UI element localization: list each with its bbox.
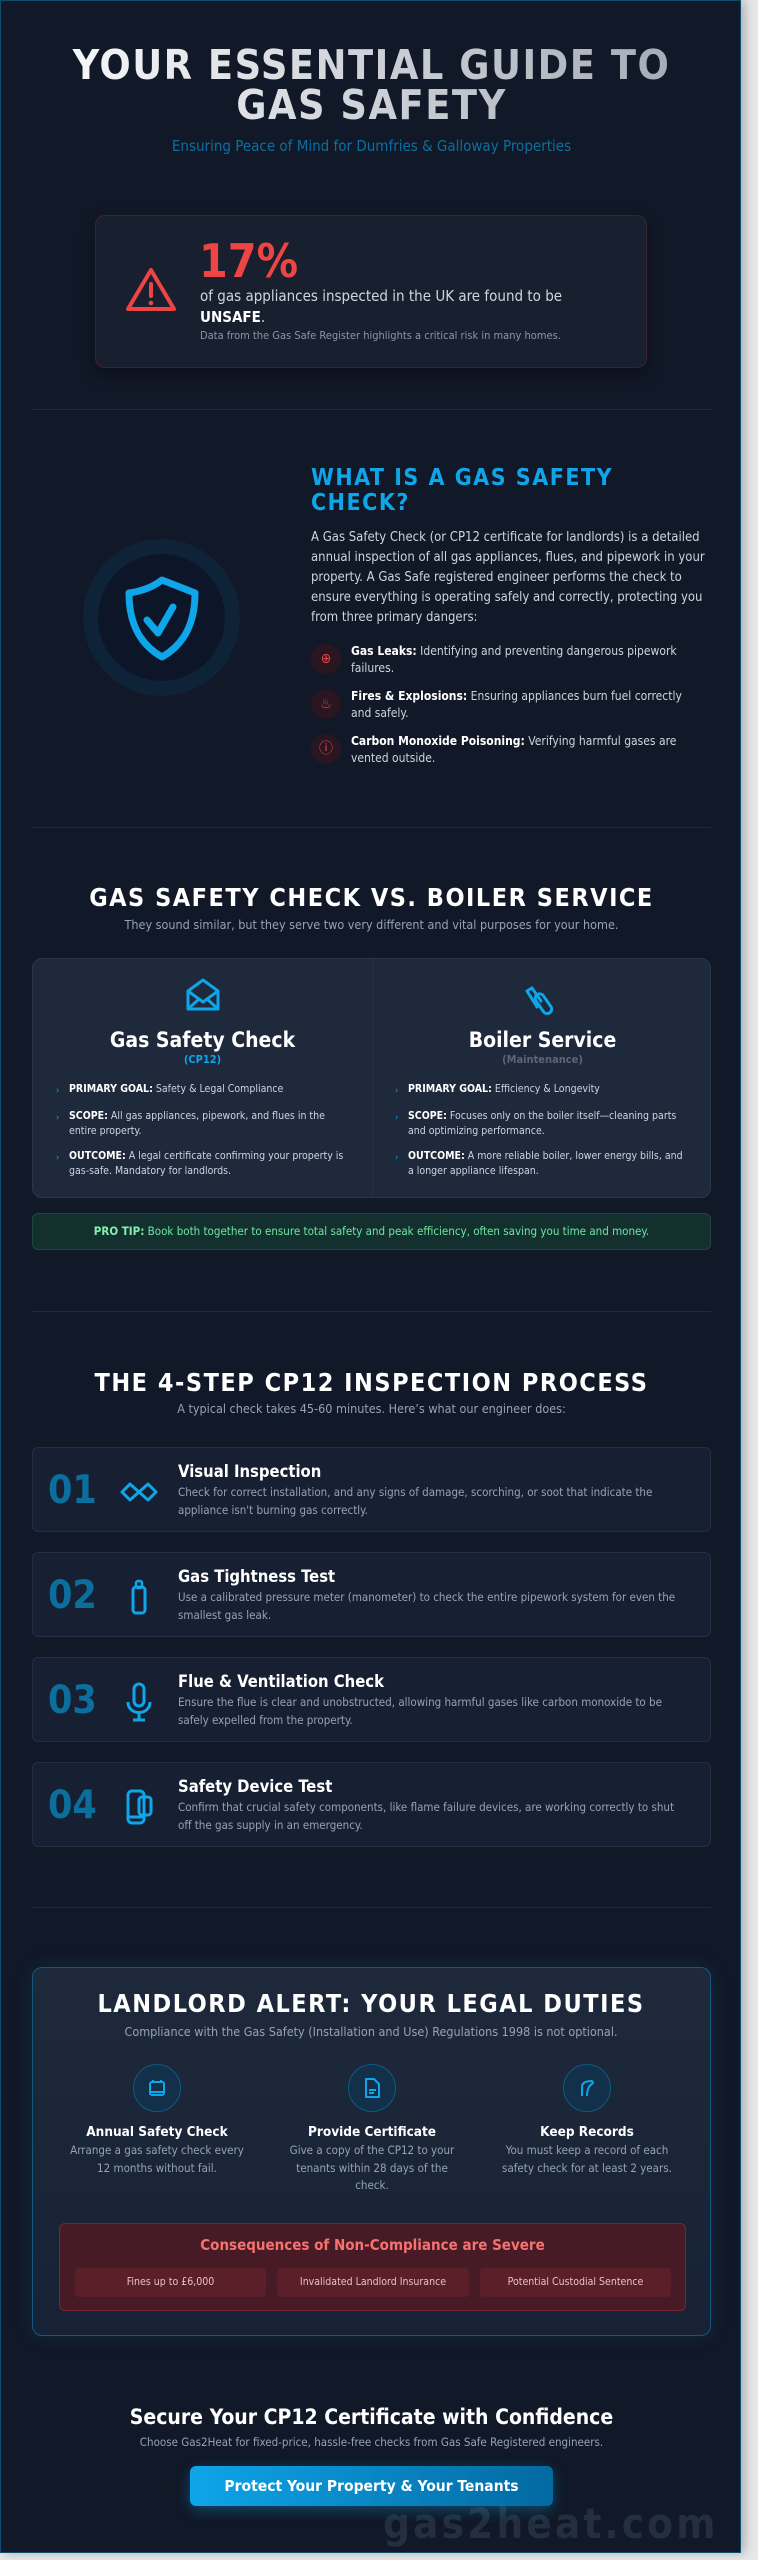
- step 1: Check for correct installation, and any signs of damage, scorching, or soot that indicate the appliance isn't burning gas correctly.: [178, 1485, 652, 1516]
- paragraph: A Gas Safety Check (or CP12 certificate for landlords) is a detailed annual inspection of all gas appliances, flues, and pipework in your property. A Gas Safe registered engineer performs the check to ensure everything is operating safely and correctly, protecting you from three primary dangers:: [311, 530, 705, 625]
- stat number: 17%: [199, 234, 298, 288]
- danger: fires: Fires & Explosions: Ensuring appliances burn fuel correctly and safely.: [351, 689, 682, 720]
- duty: certificate: [290, 2064, 454, 2192]
- step 4: [32, 1762, 711, 1847]
- heading: process: THE 4-STEP CP12 INSPECTION PROCESS: [95, 1368, 648, 1397]
- heading: what is: WHAT IS A GAS SAFETY CHECK?: [311, 465, 613, 516]
- column: gas safety check: PRIMARY GOAL: Safety & Legal Compliance: [69, 1083, 283, 1095]
- stat source: Data from the Gas Safe Register highlights a critical risk in many homes.: [200, 329, 561, 342]
- step 2: 02: [48, 1573, 97, 1618]
- CTA button: [190, 2466, 553, 2506]
- duty: annual check: [70, 2064, 244, 2174]
- duty: records: Keep Records: [540, 2124, 634, 2140]
- column: gas safety check: ›: [56, 1153, 59, 1163]
- CTA button: Protect Your Property & Your Tenants: [224, 2477, 519, 2495]
- icon: flue: [126, 1682, 152, 1722]
- title: [1, 45, 742, 125]
- title: GAS SAFETY: [236, 81, 507, 129]
- consequences box: [59, 2223, 686, 2311]
- heading: LANDLORD ALERT: YOUR LEGAL DUTIES: [97, 1989, 645, 2018]
- subheading: Compliance with the Gas Safety (Installation and Use) Regulations 1998 is not optional.: [124, 2024, 618, 2039]
- icon: eye: [120, 1482, 158, 1502]
- icon: wrench: [525, 986, 554, 1015]
- column: boiler service: [395, 986, 683, 1177]
- danger: gas leaks: ⊕: [321, 651, 331, 667]
- step 4: 04: [48, 1783, 97, 1828]
- step 4: Confirm that crucial safety components, like flame failure devices, are working correctly to shut off the gas supply in an emergency.: [178, 1800, 674, 1832]
- duty: records: You must keep a record of each safety check for at least 2 years.: [502, 2143, 672, 2174]
- column: boiler service: ›: [395, 1153, 398, 1163]
- column: boiler service: (Maintenance): [502, 1053, 583, 1066]
- danger: gas leaks: Gas Leaks: Identifying and preventing dangerous pipework failures.: [351, 644, 677, 675]
- step 3: Flue & Ventilation Check: [178, 1672, 384, 1691]
- pro tip: [32, 1213, 711, 1250]
- step 1: 01: [48, 1468, 97, 1513]
- title: YOUR ESSENTIAL GUIDE TO: [73, 41, 670, 89]
- pro tip: PRO TIP: Book both together to ensure total safety and peak efficiency, often saving you time and money.: [94, 1224, 649, 1238]
- danger: CO: Carbon Monoxide Poisoning: Verifying harmful gases are vented outside.: [351, 734, 676, 765]
- watermark: gas2heat.com: [383, 2499, 719, 2548]
- step 1: [32, 1447, 711, 1532]
- comparison panel: [32, 958, 711, 1198]
- column: gas safety check: ›: [56, 1086, 59, 1096]
- step 2: Use a calibrated pressure meter (manometer) to check the entire pipework system for even the smallest gas leak.: [178, 1590, 675, 1622]
- duty: annual check: Annual Safety Check: [86, 2124, 228, 2140]
- danger: fires: ♨: [320, 696, 332, 712]
- consequences box: Consequences of Non-Compliance are Severe: [200, 2236, 545, 2254]
- column: boiler service: ›: [395, 1113, 398, 1123]
- CTA subtext: Choose Gas2Heat for fixed-price, hassle-free checks from Gas Safe Registered engineers.: [140, 2435, 603, 2449]
- column: gas safety check: OUTCOME: A legal certificate confirming your property is gas-safe. Mandatory for landlords.: [69, 1150, 343, 1177]
- stat text: of gas appliances inspected in the UK are found to be UNSAFE.: [200, 287, 562, 326]
- step 2: Gas Tightness Test: [178, 1567, 335, 1586]
- CTA heading: Secure Your CP12 Certificate with Confidence: [130, 2405, 613, 2429]
- consequence pills: [75, 2268, 266, 2297]
- column: boiler service: OUTCOME: A more reliable boiler, lower energy bills, and a longer appliance lifespan.: [408, 1150, 683, 1177]
- stat card: [95, 215, 647, 368]
- icon: meter: [132, 1580, 146, 1614]
- duty: certificate: Provide Certificate: [308, 2124, 436, 2140]
- icon: warning triangle: [126, 268, 176, 311]
- danger list: [311, 644, 682, 765]
- icon: envelope: [186, 978, 220, 1010]
- column: boiler service: SCOPE: Focuses only on the boiler itself—cleaning parts and optimizing performance.: [408, 1110, 676, 1137]
- subheading: A typical check takes 45-60 minutes. Here’s what our engineer does:: [177, 1401, 566, 1416]
- step 3: Ensure the flue is clear and unobstructed, allowing harmful gases like carbon monoxide to be safely expelled from the property.: [178, 1695, 662, 1726]
- heading: comparison: GAS SAFETY CHECK VS. BOILER SERVICE: [89, 883, 654, 912]
- step 4: Safety Device Test: [178, 1777, 332, 1796]
- panel: landlord alert: [32, 1967, 711, 2336]
- step 1: Visual Inspection: [178, 1462, 321, 1481]
- duty: annual check: Arrange a gas safety check every 12 months without fail.: [70, 2143, 244, 2174]
- icon: device: [126, 1790, 152, 1824]
- subheading: They sound similar, but they serve two very different and vital purposes for your home.: [125, 917, 618, 932]
- duty: certificate: Give a copy of the CP12 to your tenants within 28 days of the check.: [290, 2143, 454, 2192]
- column: gas safety check: Gas Safety Check: [110, 1028, 295, 1052]
- subtitle: Ensuring Peace of Mind for Dumfries & Galloway Properties: [172, 137, 571, 155]
- consequences box: Invalidated Landlord Insurance: [300, 2276, 446, 2288]
- danger: CO: ⓘ: [319, 741, 333, 757]
- step 3: [32, 1657, 711, 1742]
- step 3: 03: [48, 1678, 97, 1723]
- column: gas safety check: SCOPE: All gas appliances, pipework, and flues in the entire property.: [69, 1110, 325, 1137]
- consequences box: Potential Custodial Sentence: [508, 2276, 643, 2288]
- column: boiler service: ›: [395, 1086, 398, 1096]
- duty: records: [502, 2064, 672, 2174]
- step 2: [32, 1552, 711, 1637]
- column: boiler service: PRIMARY GOAL: Efficiency & Longevity: [408, 1083, 600, 1095]
- column: boiler service: Boiler Service: [469, 1028, 616, 1052]
- icon: shield: [83, 539, 240, 696]
- column: gas safety check: [56, 978, 343, 1177]
- column: gas safety check: (CP12): [184, 1053, 221, 1066]
- column: gas safety check: ›: [56, 1113, 59, 1123]
- consequence pills: Fines up to £6,000: [127, 2276, 214, 2288]
